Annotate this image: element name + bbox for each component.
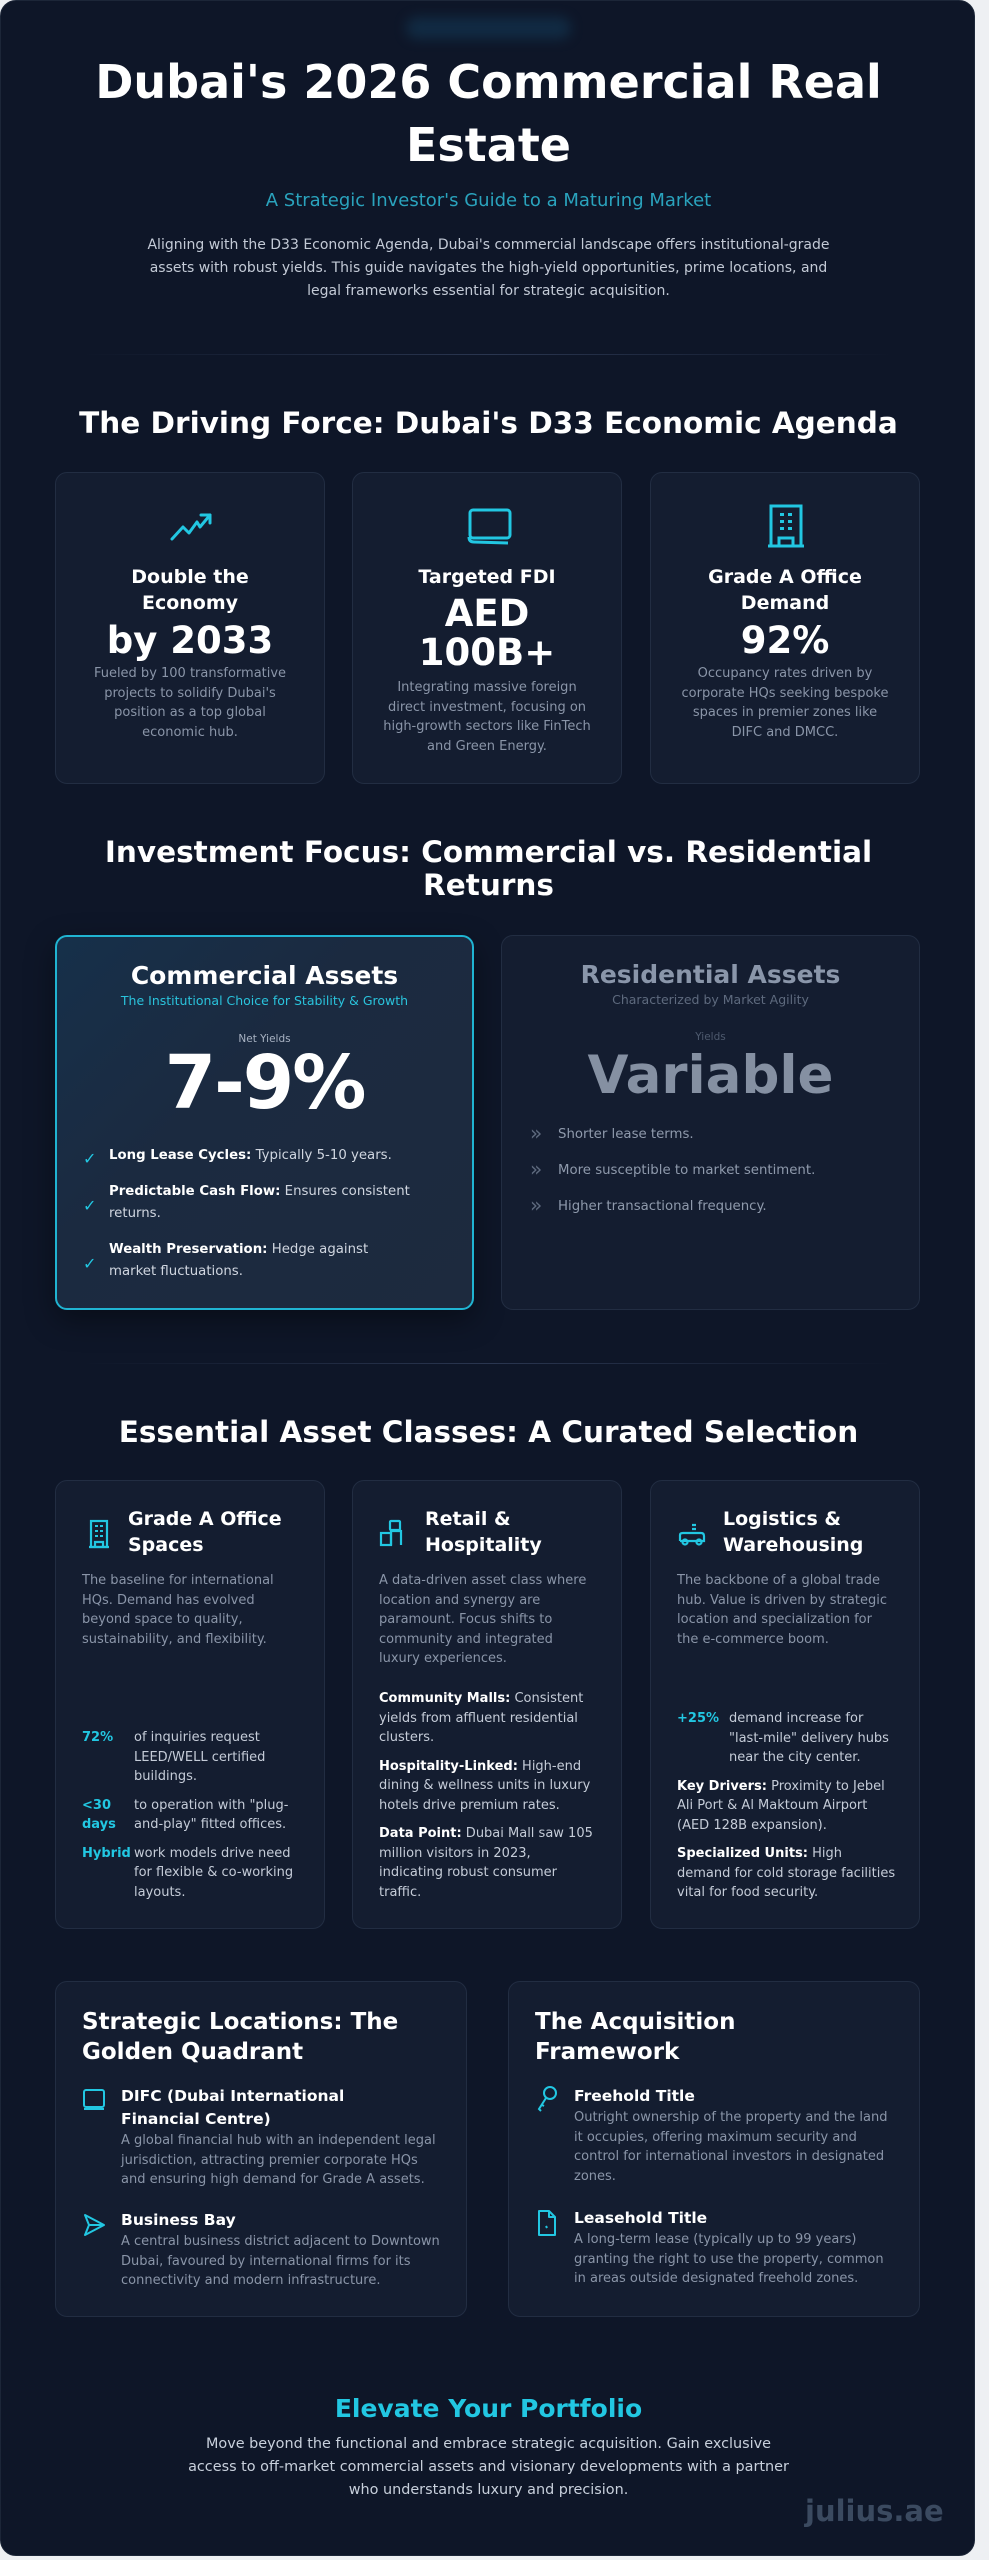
icon: trend up bbox=[170, 513, 212, 541]
description: The baseline for international HQs. Demand has evolved beyond space to quality, sustainability, and flexibility. bbox=[82, 1573, 274, 1646]
text: Targeted FDI bbox=[418, 566, 556, 588]
CTA heading: Elevate Your Portfolio bbox=[335, 2394, 642, 2423]
intro paragraph: Aligning with the D33 Economic Agenda, Dubai's commercial landscape offers institutional-grade assets with robust yields. This guide navigates the high-yield opportunities, prime locations, and legal frameworks essential for strategic acquisition. bbox=[147, 237, 830, 299]
heading: investment focus: Investment Focus: Commercial vs. Residential bbox=[105, 835, 872, 869]
CTA paragraph: Move beyond the functional and embrace strategic acquisition. Gain exclusive access to off-market commercial assets and visionary developments with a partner who understands luxury and precision. bbox=[188, 2436, 789, 2498]
text: Integrating massive foreign direct investment, focusing on high-growth sectors like FinTech and Green Energy. bbox=[383, 680, 591, 754]
title bbox=[95, 55, 882, 172]
heading: investment focus bbox=[105, 835, 872, 902]
watermark: julius.ae bbox=[805, 2494, 944, 2528]
title: Grade A Office bbox=[128, 1508, 282, 1530]
bullet list: Higher transactional frequency. bbox=[558, 1199, 767, 1214]
text: Fueled by 100 transformative projects to solidify Dubai's position as a top global economic hub. bbox=[94, 666, 286, 740]
yield value: Variable bbox=[587, 1045, 834, 1106]
stats: +25% bbox=[677, 1711, 719, 1726]
bullet list bbox=[83, 1148, 410, 1279]
bullet list: Long Lease Cycles: Typically 5-10 years. bbox=[109, 1148, 392, 1163]
bullet list: Shorter lease terms. bbox=[558, 1127, 694, 1142]
icon: tablet bbox=[83, 2089, 105, 2110]
icon: office building bbox=[89, 1520, 109, 1548]
stats: <30 days bbox=[82, 1798, 116, 1832]
bullet list: ✓ bbox=[83, 1254, 96, 1273]
item: business bay: A central business district adjacent to Downtown Dubai, favoured by international firms for its connectivity and modern infrastructure. bbox=[121, 2234, 440, 2288]
stats: Key Drivers: Proximity to Jebel Ali Port & Al Maktoum Airport (AED 128B expansion). bbox=[677, 1778, 885, 1832]
item: business bay: Business Bay bbox=[121, 2211, 236, 2229]
panel: commercial assets bbox=[55, 935, 474, 1310]
text bbox=[682, 566, 888, 740]
heading bbox=[535, 2009, 735, 2065]
text: Grade A Office bbox=[708, 566, 862, 588]
text: AED bbox=[445, 592, 529, 635]
bullet list bbox=[530, 1121, 815, 1217]
title: Warehousing bbox=[723, 1534, 863, 1556]
heading: driving force: The Driving Force: Dubai's D33 Economic Agenda bbox=[79, 406, 898, 440]
title bbox=[723, 1508, 863, 1556]
title: Spaces bbox=[128, 1534, 204, 1556]
title: Logistics & bbox=[723, 1508, 841, 1530]
bullet list: More susceptible to market sentiment. bbox=[558, 1163, 815, 1178]
text: 100B+ bbox=[419, 631, 555, 674]
bullet list: ✓ bbox=[83, 1196, 96, 1215]
item: leasehold: Leasehold Title bbox=[574, 2209, 707, 2227]
text: Economy bbox=[142, 592, 238, 614]
stats: work models drive need for flexible & co-working layouts. bbox=[134, 1846, 293, 1900]
panel: grade A demand bbox=[650, 472, 920, 784]
panel: acquisition framework bbox=[508, 1981, 920, 2317]
stats: Specialized Units: High demand for cold storage facilities vital for food security. bbox=[677, 1846, 895, 1900]
item: freehold bbox=[538, 2086, 887, 2184]
title: Estate bbox=[406, 118, 571, 172]
item: DIFC: DIFC (Dubai International Financial Centre) bbox=[121, 2087, 344, 2128]
bullet list: ✓ bbox=[83, 1149, 96, 1168]
title: Retail & bbox=[425, 1508, 511, 1530]
item: freehold: Freehold Title bbox=[574, 2087, 695, 2105]
text: Occupancy rates driven by corporate HQs seeking bespoke spaces in premier zones like DIFC and DMCC. bbox=[682, 666, 888, 740]
text bbox=[94, 566, 286, 740]
yield label: Yields bbox=[695, 1031, 726, 1043]
panel: logistics bbox=[650, 1480, 920, 1929]
stats bbox=[82, 1730, 293, 1900]
icon: shop bbox=[380, 1520, 402, 1546]
heading: Framework bbox=[535, 2039, 679, 2065]
heading: The Acquisition bbox=[535, 2009, 735, 2035]
stats: Community Malls: Consistent yields from affluent residential clusters. bbox=[379, 1691, 583, 1745]
description: The backbone of a global trade hub. Value is driven by strategic location and specialization for the e-commerce boom. bbox=[677, 1573, 887, 1646]
yield label: Net Yields bbox=[238, 1033, 291, 1045]
icon: truck bbox=[678, 1524, 706, 1546]
item: leasehold bbox=[538, 2209, 884, 2286]
title: Hospitality bbox=[425, 1534, 542, 1556]
description: A data-driven asset class where location and synergy are paramount. Focus shifts to community and integrated luxury experiences. bbox=[379, 1573, 586, 1666]
bullet list: Predictable Cash Flow: Ensures consistent returns. bbox=[109, 1184, 410, 1221]
icon: document bbox=[538, 2210, 556, 2236]
panel: grade A office bbox=[55, 1480, 325, 1929]
panel: retail hospitality bbox=[352, 1480, 622, 1929]
top glow bbox=[406, 17, 571, 39]
stats: Hospitality-Linked: High-end dining & wellness units in luxury hotels drive premium rates. bbox=[379, 1758, 590, 1812]
icon: building bbox=[768, 504, 804, 548]
bullet list: » bbox=[530, 1193, 542, 1217]
icon: send bbox=[84, 2214, 105, 2236]
heading: asset classes: Essential Asset Classes: A Curated Selection bbox=[119, 1415, 858, 1449]
heading: investment focus: Returns bbox=[423, 868, 554, 902]
title: Dubai's 2026 Commercial Real bbox=[95, 55, 882, 109]
bullet list: » bbox=[530, 1157, 542, 1181]
title bbox=[425, 1508, 542, 1556]
text: Double the bbox=[131, 566, 249, 588]
panel: targeted FDI bbox=[352, 472, 622, 784]
icon: money bbox=[468, 508, 512, 544]
item: freehold: Outright ownership of the property and the land it occupies, offering maximum security and control for international investors in designated zones. bbox=[574, 2110, 887, 2184]
text bbox=[383, 566, 591, 754]
stats: Data Point: Dubai Mall saw 105 million visitors in 2023, indicating robust consumer traffic. bbox=[379, 1826, 593, 1900]
item: business bay bbox=[84, 2211, 440, 2288]
heading: Residential Assets bbox=[581, 960, 840, 989]
subtitle: A Strategic Investor's Guide to a Maturing Market bbox=[266, 190, 711, 211]
panel: residential assets bbox=[501, 935, 920, 1310]
stats bbox=[379, 1691, 593, 1900]
text: 92% bbox=[741, 619, 829, 662]
bullet list: Wealth Preservation: Hedge against market fluctuations. bbox=[109, 1242, 368, 1279]
stats: demand increase for "last-mile" delivery hubs near the city center. bbox=[729, 1711, 889, 1765]
heading: Commercial Assets bbox=[131, 961, 398, 990]
stats: to operation with "plug-and-play" fitted offices. bbox=[134, 1798, 288, 1832]
text: Demand bbox=[741, 592, 829, 614]
stats: of inquiries request LEED/WELL certified buildings. bbox=[134, 1730, 265, 1784]
item: DIFC bbox=[83, 2087, 436, 2187]
panel: double the economy bbox=[55, 472, 325, 784]
panel: strategic locations bbox=[55, 1981, 467, 2317]
subheading: The Institutional Choice for Stability & Growth bbox=[121, 993, 408, 1008]
item: leasehold: A long-term lease (typically up to 99 years) granting the right to use the property, common in areas outside designated freehold zones. bbox=[574, 2232, 884, 2286]
stats: 72% bbox=[82, 1730, 113, 1745]
stats bbox=[677, 1711, 895, 1900]
stats: Hybrid bbox=[82, 1846, 131, 1860]
subheading: Characterized by Market Agility bbox=[612, 992, 809, 1007]
text: by 2033 bbox=[107, 619, 273, 662]
item: DIFC: A global financial hub with an independent legal jurisdiction, attracting premier corporate HQs and ensuring high demand for Grade A assets. bbox=[121, 2133, 436, 2187]
bullet list: » bbox=[530, 1121, 542, 1145]
title bbox=[128, 1508, 282, 1556]
yield value: 7-9% bbox=[165, 1040, 364, 1126]
heading: Strategic Locations: The Golden Quadrant bbox=[82, 2009, 398, 2065]
icon: key bbox=[538, 2086, 557, 2112]
